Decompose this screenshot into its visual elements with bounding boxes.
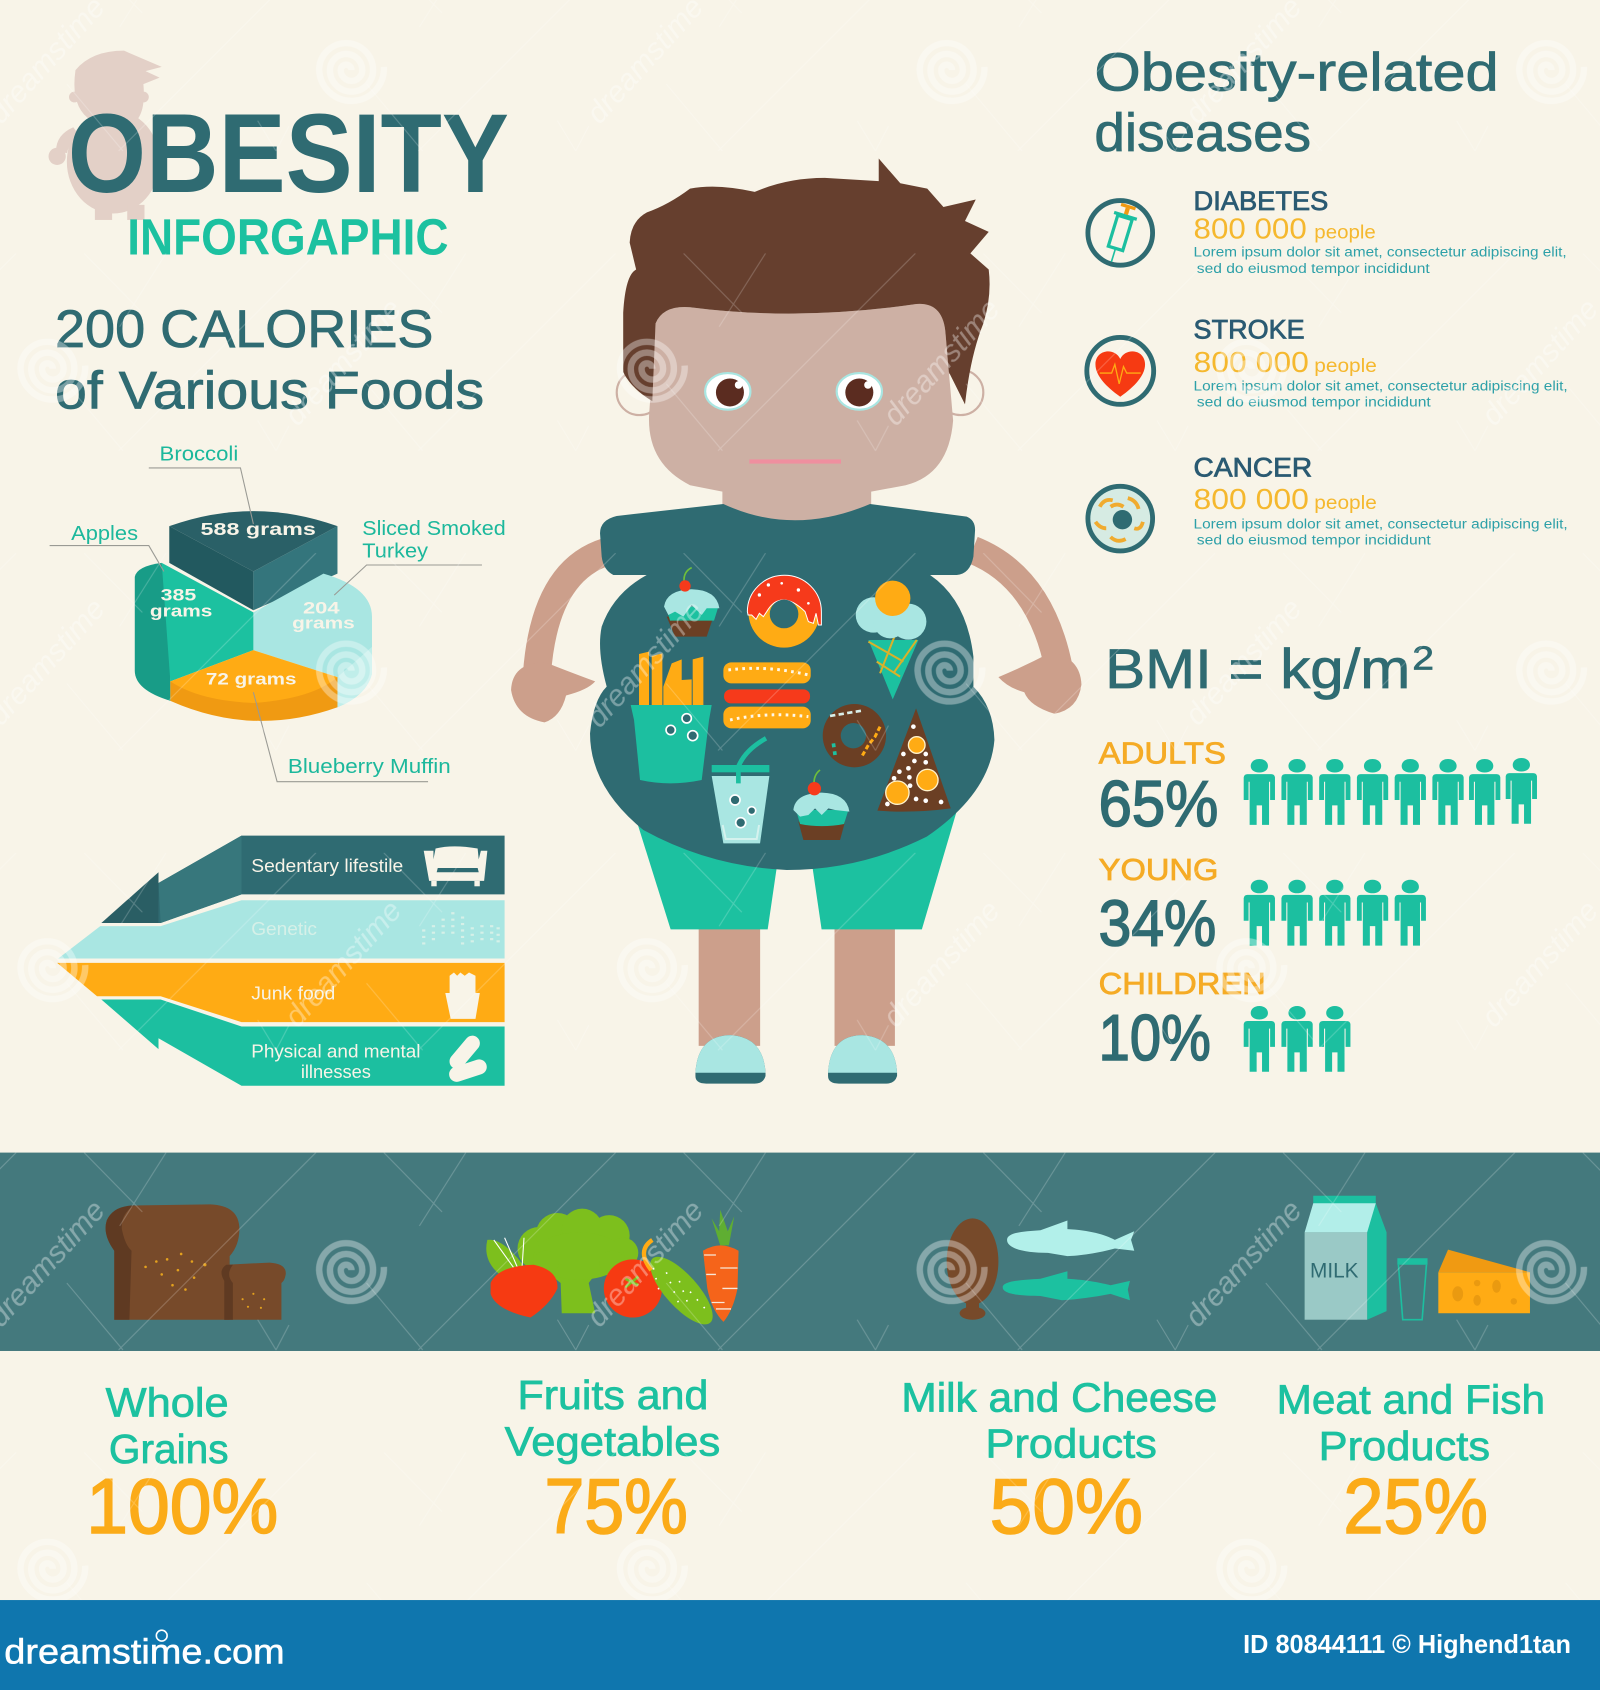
icon: beet (491, 1238, 557, 1318)
label: blueberry muffin (253, 692, 451, 782)
watermark overlay: dreamstime (877, 894, 1007, 1034)
label: milk and cheese products (901, 1374, 1217, 1467)
pie segment: apples (135, 563, 253, 701)
icon: ice cream cone (856, 581, 926, 699)
arrow: physical and mental illnesses: Physical and mental (251, 1041, 420, 1062)
subtitle: INFORGAPHIC (127, 208, 449, 265)
disease: cancer: sed do eiusmod tempor incididunt (1197, 531, 1431, 547)
panel: food group band (0, 1153, 1600, 1351)
disease: cancer: 800 000 (1194, 484, 1309, 516)
value: 100%: 100% (86, 1464, 278, 1550)
disease: stroke: 800 000 (1194, 347, 1309, 379)
label: blueberry muffin: Blueberry Muffin (288, 755, 451, 778)
stat: adults: ADULTS (1099, 737, 1226, 770)
arrow: physical and mental illnesses (101, 999, 505, 1086)
watermark overlay: dreamstime (580, 595, 710, 734)
disease: stroke: Lorem ipsum dolor sit amet, consectetur adipiscing elit, (1194, 377, 1568, 393)
pictogram: children (1244, 1006, 1350, 1072)
value: 75%: 75% (544, 1464, 688, 1550)
label: apples (50, 522, 164, 571)
icon: pills (446, 1033, 489, 1084)
character: right hand (998, 652, 1081, 714)
arrow: sedentary lifestyle: Sedentary lifestile (251, 855, 403, 876)
icon: light fish (1007, 1221, 1134, 1256)
icon: pizza slice (877, 708, 951, 812)
disease: stroke: people (1314, 355, 1377, 377)
value: 50%: 50% (990, 1464, 1143, 1550)
watermark overlay: dreamstime (1179, 1194, 1309, 1333)
icon: carrot (703, 1210, 739, 1322)
stat: young: YOUNG (1099, 854, 1218, 887)
stat: children: 10% (1099, 1001, 1211, 1074)
icon: cupcake two (793, 770, 849, 840)
disease: stroke: sed do eiusmod tempor incididunt (1197, 393, 1431, 409)
icon: burger (723, 662, 811, 728)
footer: logo: dreamstime.com (4, 1632, 285, 1672)
label: meat and fish products: Meat and Fish (1277, 1377, 1545, 1423)
label: broccoli: Broccoli (160, 442, 238, 465)
icon: heart (1087, 337, 1154, 404)
character: mouth (749, 459, 841, 463)
character: left hand (511, 662, 595, 722)
pictogram: young (1244, 880, 1426, 946)
label: fruits and vegetables (505, 1372, 720, 1465)
icon: chocolate donut (823, 704, 886, 767)
label: whole grains (106, 1380, 229, 1472)
heading: obesity-related diseases: Obesity-related (1094, 43, 1499, 103)
pie value: 204 grams: grams (292, 615, 355, 633)
arrow: genetic: Genetic (251, 918, 317, 939)
pie value: 204 grams (292, 599, 355, 633)
icon: fries (445, 973, 480, 1019)
stat: children (1099, 968, 1350, 1074)
arrow chart: causes of obesity (57, 836, 505, 1086)
label: milk and cheese products: Products (985, 1421, 1157, 1467)
heading: 200 calories: of Various Foods (55, 362, 484, 421)
character: left arm (537, 552, 606, 674)
label: meat and fish products (1277, 1377, 1545, 1469)
watermark overlay: dreamstime (580, 1194, 710, 1333)
icon: sofa (424, 846, 487, 886)
character: right eye (837, 373, 882, 410)
pie value: 72 grams: 72 grams (206, 671, 297, 689)
disease: diabetes: people (1314, 221, 1376, 243)
character: hair (623, 158, 990, 404)
arrow: genetic (58, 900, 505, 959)
pictogram: adults (1244, 758, 1537, 825)
formula: BMI: 2 (1412, 641, 1434, 678)
character: ears (617, 370, 983, 415)
stat: adults: 65% (1099, 767, 1218, 840)
icon: iced donut (747, 575, 821, 648)
label: apples: Apples (71, 522, 138, 545)
heading: 200 calories (55, 300, 484, 421)
disease: diabetes: sed do eiusmod tempor incididunt (1197, 260, 1430, 276)
disease: diabetes: DIABETES (1194, 186, 1328, 216)
watermark overlay: dreamstime (877, 293, 1007, 432)
icon: cucumber (641, 1240, 722, 1333)
icon: cheese (1438, 1250, 1530, 1313)
stat: young (1099, 854, 1426, 960)
disease: cancer (1088, 453, 1568, 551)
icon: teal fish (1003, 1271, 1130, 1300)
icon: broccoli (518, 1209, 638, 1313)
icon: leaf (486, 1240, 528, 1283)
disease: cancer: people (1314, 492, 1377, 514)
watermark overlay: dreamstime (278, 894, 408, 1034)
character: right arm (973, 550, 1059, 668)
icon: tomato (604, 1259, 662, 1318)
stat: young: 34% (1099, 887, 1216, 960)
disease: diabetes: 800 000 (1194, 213, 1307, 245)
footer bar (0, 1600, 1600, 1690)
pie segment: sliced smoked turkey (253, 574, 372, 707)
value: 25%: 25% (1343, 1464, 1488, 1550)
pie value: 385 grams: 385 (161, 587, 196, 605)
icon: vegetables (486, 1209, 739, 1333)
icon: milk carton: MILK (1310, 1258, 1359, 1283)
character: legs (699, 916, 895, 1046)
pie value: 588 grams: 588 grams (201, 519, 316, 539)
watermark overlay: dreamstime (1179, 593, 1309, 732)
heading: 200 calories: 200 CALORIES (55, 300, 433, 359)
disease: stroke (1087, 315, 1568, 409)
icon: glass (1397, 1258, 1428, 1320)
icon: milk carton (1305, 1196, 1387, 1320)
pie value: 385 grams (150, 587, 212, 621)
arrow: junk food (57, 963, 505, 1022)
character: right shoe (828, 1035, 897, 1084)
footer: image id: ID 80844111 © Highend1tan (1243, 1631, 1571, 1659)
label: sliced smoked turkey: Sliced Smoked (362, 517, 506, 540)
character: shirt with junk food (590, 504, 994, 870)
icon: drink cup (712, 738, 769, 843)
character: head (649, 304, 953, 523)
pie value: 204 grams: 204 (303, 599, 340, 617)
formula: BMI: BMI = kg/m (1105, 637, 1410, 700)
disease: stroke: STROKE (1194, 315, 1305, 345)
icon: drumstick (947, 1218, 998, 1320)
stat: adults (1099, 737, 1537, 840)
heading: obesity-related diseases (1094, 43, 1499, 163)
icon: cupcake one (664, 568, 719, 637)
pie chart: 200 calories of foods (135, 511, 372, 721)
arrow: physical and mental illnesses: illnesses (301, 1061, 371, 1082)
label: sliced smoked turkey: Turkey (362, 539, 429, 562)
title: OBESITY (68, 90, 509, 216)
disease: cancer: Lorem ipsum dolor sit amet, consectetur adipiscing elit, (1194, 515, 1568, 531)
watermark overlay: dreamstime (278, 293, 408, 432)
label: milk and cheese products: Milk and Cheese (901, 1374, 1217, 1420)
arrow: junk food: Junk food (251, 982, 335, 1003)
icon: bread loaves (106, 1204, 286, 1320)
heading: obesity-related diseases: diseases (1094, 103, 1311, 163)
character: obese boy (511, 158, 1081, 1084)
arrow: sedentary lifestyle (101, 836, 505, 923)
pie segment: broccoli (169, 511, 337, 610)
pie value: 385 grams: grams (150, 603, 212, 621)
disease: cancer: CANCER (1194, 453, 1312, 483)
label: sliced smoked turkey (334, 517, 506, 595)
stat: children: CHILDREN (1099, 968, 1266, 1001)
label: fruits and vegetables: Vegetables (505, 1419, 720, 1465)
icon: dna dots (424, 912, 498, 945)
character: shorts (636, 809, 957, 929)
icon: fries in box (631, 652, 712, 783)
label: fruits and vegetables: Fruits and (518, 1372, 708, 1418)
label: broccoli (149, 442, 253, 524)
shirt body (590, 504, 994, 870)
icon: cancer cell (1088, 486, 1153, 551)
character: left eye (705, 373, 750, 410)
disease: diabetes (1088, 186, 1567, 276)
pie segment: blueberry muffin (170, 650, 337, 721)
icon: syringe (1088, 201, 1153, 265)
disease: diabetes: Lorem ipsum dolor sit amet, consectetur adipiscing elit, (1194, 244, 1567, 260)
label: meat and fish products: Products (1319, 1423, 1490, 1469)
label: whole grains: Grains (109, 1426, 229, 1472)
character: left shoe (695, 1035, 766, 1084)
icon: boy silhouette behind title (49, 51, 162, 220)
label: whole grains: Whole (106, 1380, 229, 1426)
